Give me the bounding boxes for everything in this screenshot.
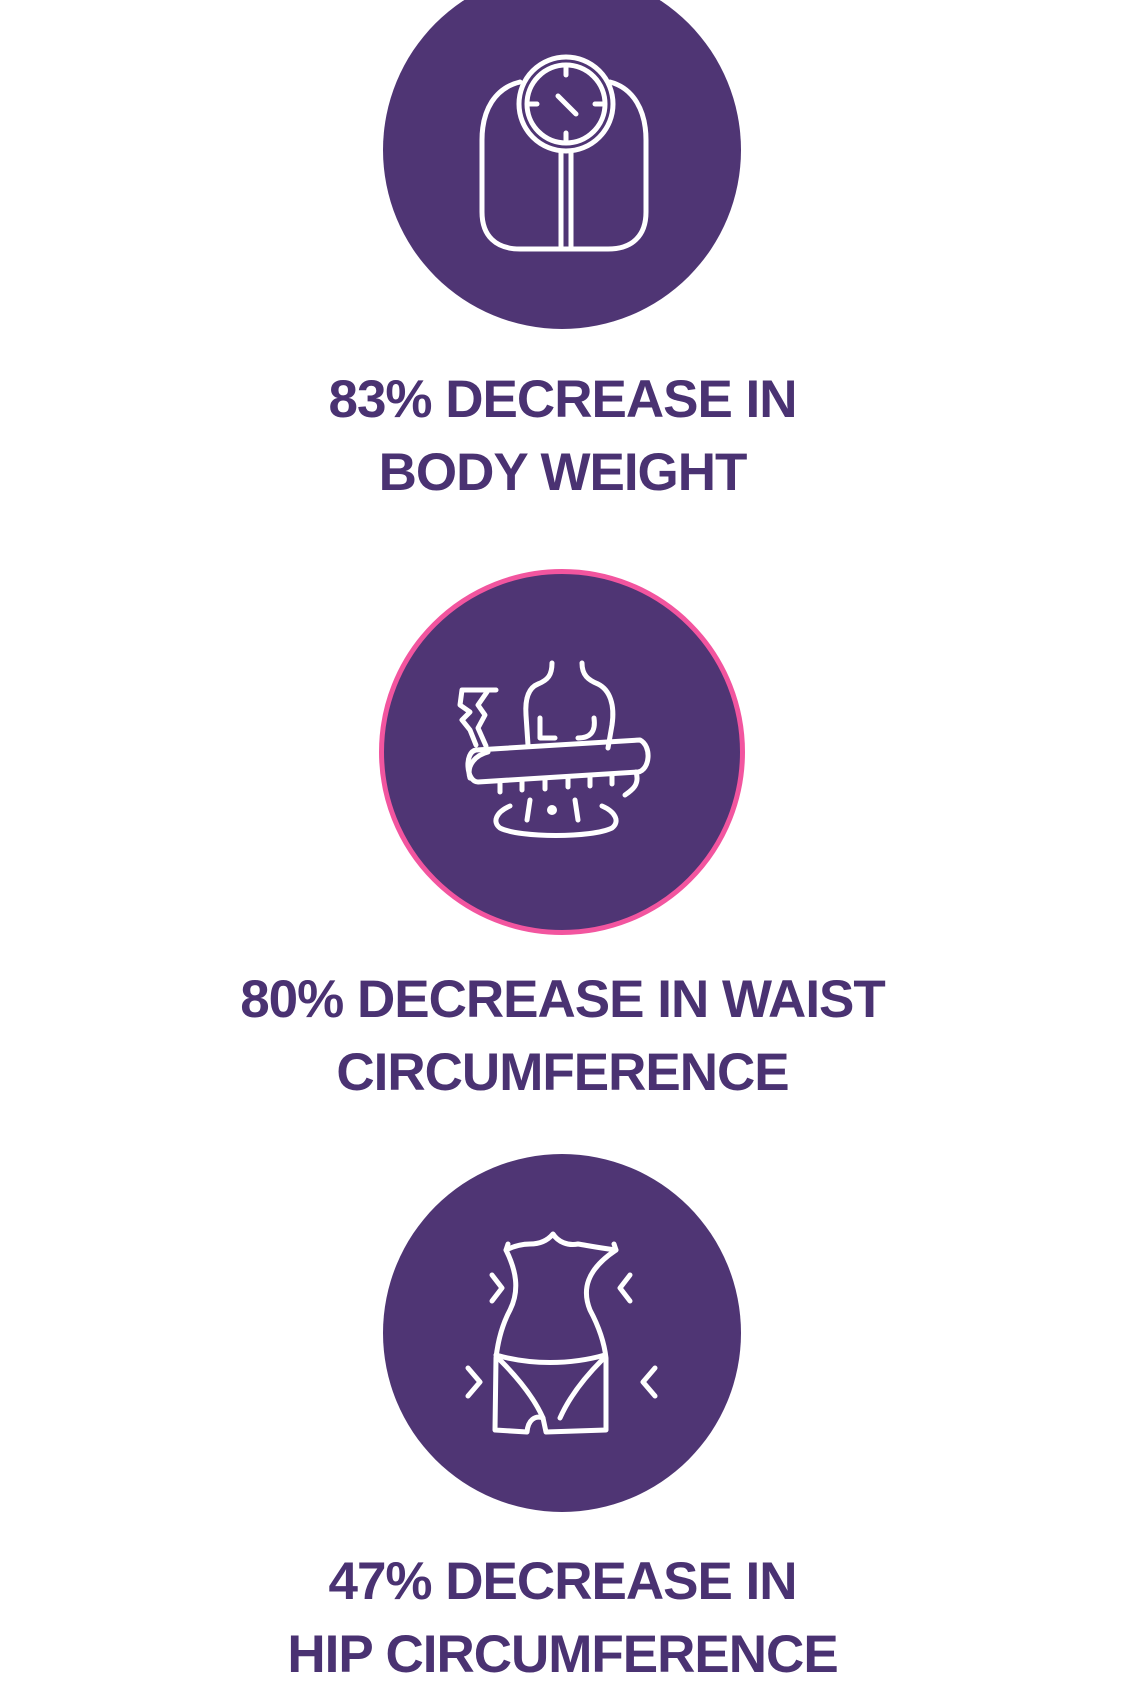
- text: body weight stat: BODY WEIGHT: [379, 443, 746, 502]
- text: hip stat: [287, 1552, 838, 1684]
- text: body weight stat: 83% DECREASE IN: [328, 370, 797, 429]
- text: waist stat: CIRCUMFERENCE: [336, 1043, 789, 1102]
- text: waist stat: [240, 970, 886, 1102]
- text: waist stat: 80% DECREASE IN WAIST: [240, 970, 885, 1029]
- circle: hip circumference: [383, 1154, 741, 1512]
- text: body weight stat: [328, 370, 797, 502]
- icon: scale: [480, 54, 648, 252]
- circle: waist circumference (pink ring): [379, 569, 745, 935]
- circle: body weight: [383, 0, 741, 329]
- icon: torso with measuring tape: [458, 660, 651, 838]
- text: hip stat: HIP CIRCUMFERENCE: [287, 1625, 838, 1684]
- text: hip stat: 47% DECREASE IN: [328, 1552, 797, 1611]
